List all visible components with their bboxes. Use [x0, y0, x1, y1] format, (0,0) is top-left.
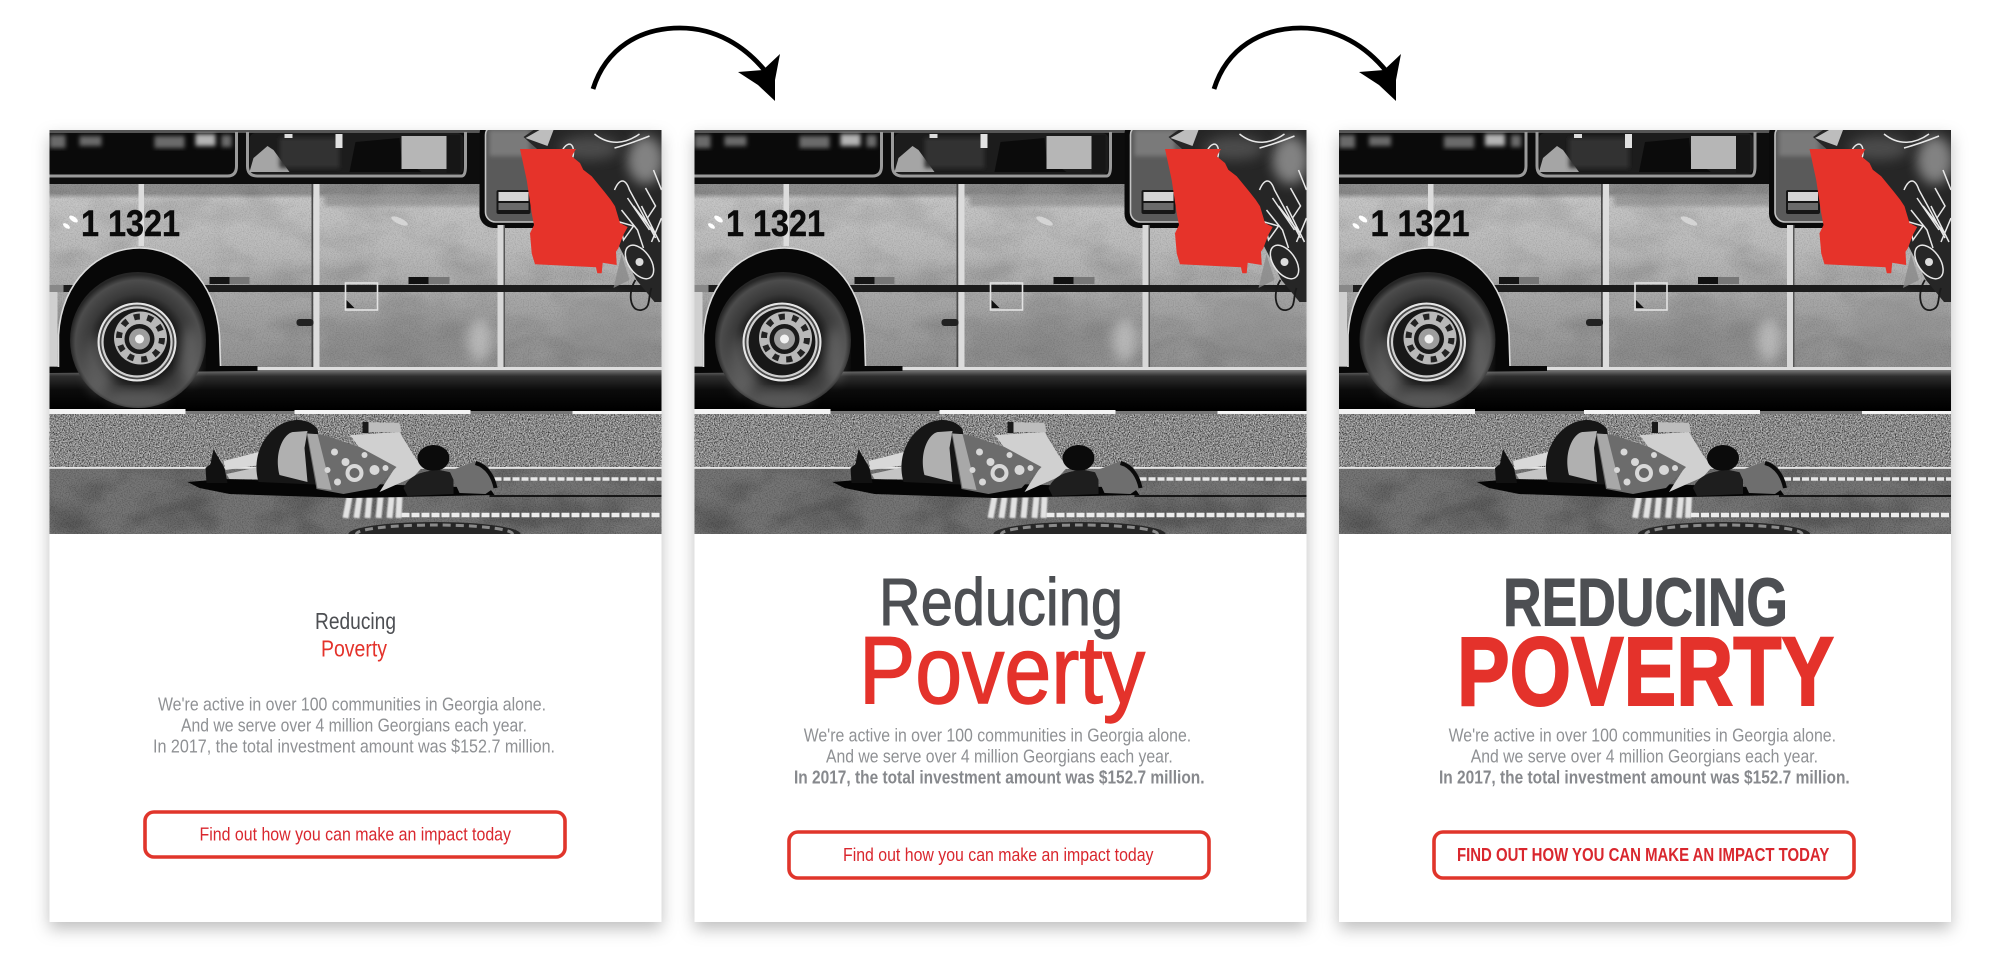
arrow: first to second card	[593, 28, 780, 101]
heading: POVERTY: POVERTY	[1457, 617, 1834, 726]
body text: We're active in over 100 communities in Georgia alone.	[804, 726, 1191, 746]
heading: Reducing: Reducing	[879, 565, 1123, 640]
photo: bus and person on pavement	[694, 120, 1308, 546]
heading: Reducing: Reducing	[315, 608, 396, 634]
icon: Georgia state map	[1810, 149, 1917, 273]
body text: In 2017, the total investment amount was $152.7 million.	[153, 737, 555, 757]
body text: In 2017, the total investment amount was $152.7 million.	[794, 768, 1204, 788]
button	[789, 832, 1209, 878]
card background	[50, 130, 662, 922]
button: Find out how you can make an impact today	[200, 825, 511, 845]
bus number: 1 1321	[726, 203, 825, 244]
heading: REDUCING: REDUCING	[1503, 565, 1788, 641]
panel: card 3, bold uppercase version	[1339, 120, 1953, 922]
body text	[1439, 726, 1850, 788]
body text	[153, 695, 555, 757]
photo: bus and person on pavement	[50, 120, 664, 546]
bus number: 1 1321	[81, 203, 180, 244]
button: FIND OUT HOW YOU CAN MAKE AN IMPACT TODAY	[1457, 845, 1829, 865]
panel: card 1, plain version	[50, 120, 664, 922]
arrow: second to third card	[1214, 28, 1401, 101]
body text: And we serve over 4 million Georgians each year.	[826, 747, 1173, 767]
body text: And we serve over 4 million Georgians each year.	[1471, 747, 1818, 767]
button: Find out how you can make an impact today	[843, 845, 1154, 865]
button	[145, 812, 565, 857]
heading: Poverty: Poverty	[321, 636, 387, 662]
body text	[794, 726, 1204, 788]
icon: Georgia state map	[520, 149, 628, 273]
body text: We're active in over 100 communities in Georgia alone.	[158, 695, 546, 715]
body text: In 2017, the total investment amount was $152.7 million.	[1439, 768, 1850, 788]
panel: card 2, larger heading version	[694, 120, 1308, 922]
photo: bus and person on pavement	[1339, 120, 1953, 546]
bus number: 1 1321	[1370, 203, 1470, 244]
heading: Poverty: Poverty	[859, 617, 1145, 724]
body text: We're active in over 100 communities in Georgia alone.	[1449, 726, 1836, 746]
icon: Georgia state map	[1165, 149, 1273, 273]
body text: And we serve over 4 million Georgians each year.	[181, 716, 527, 736]
card background	[1339, 130, 1951, 922]
button	[1434, 832, 1854, 878]
card background	[694, 130, 1306, 922]
